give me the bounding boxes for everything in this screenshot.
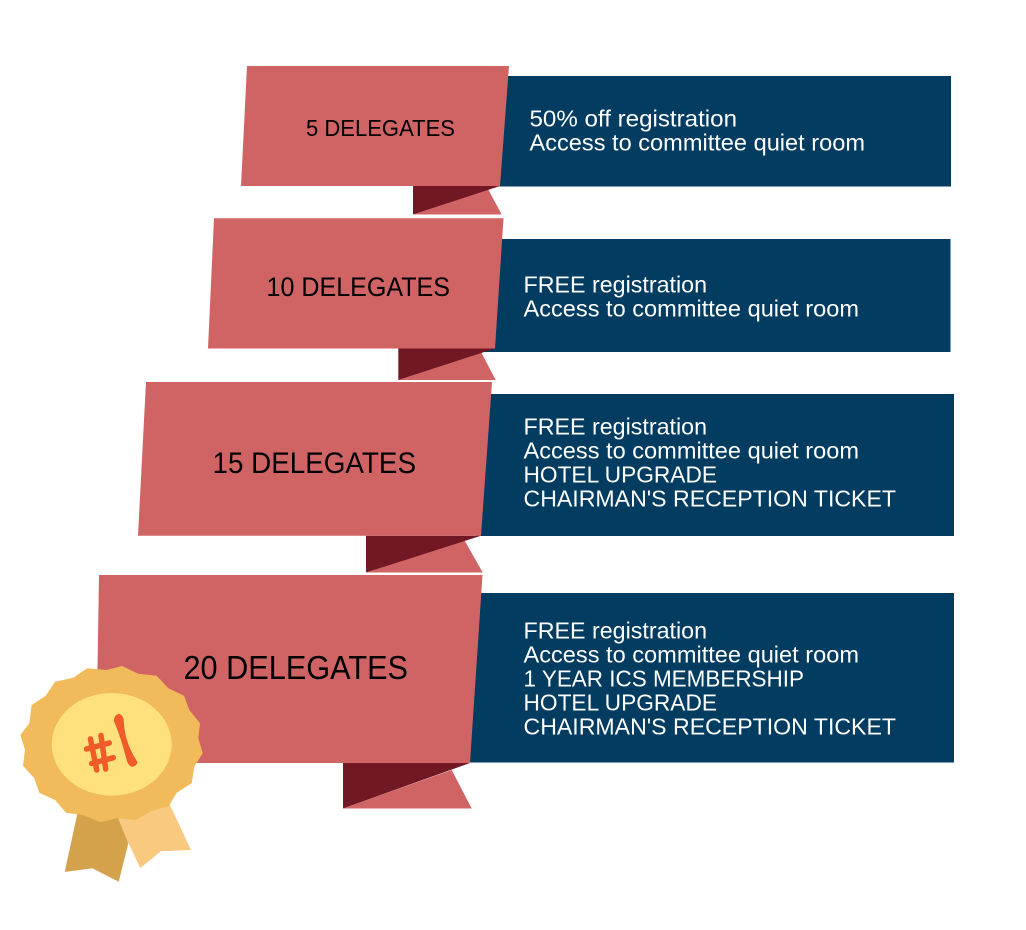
ribbon: 5 delegates bbox=[241, 66, 509, 186]
badge seal bbox=[20, 666, 203, 822]
benefits panel: 20 delegates: Access to committee quiet room bbox=[524, 642, 859, 668]
ribbon: 20 delegates bbox=[96, 575, 482, 763]
benefits panel: 15 delegates: CHAIRMAN'S RECEPTION TICKET bbox=[524, 486, 896, 512]
benefits panel: 15 delegates: Access to committee quiet room bbox=[524, 438, 859, 464]
benefits panel: 20 delegates: CHAIRMAN'S RECEPTION TICKET bbox=[524, 714, 896, 740]
tier: 15 delegates bbox=[138, 382, 954, 572]
benefits panel: 20 delegates: 1 YEAR ICS MEMBERSHIP bbox=[524, 666, 804, 692]
benefits panel: 15 delegates: FREE registration bbox=[524, 414, 707, 440]
ribbon: 10 delegates: 10 DELEGATES bbox=[266, 272, 450, 302]
ribbon fold: 10 delegates bbox=[398, 348, 496, 380]
benefits panel: 5 delegates bbox=[485, 76, 951, 186]
ribbon: 5 delegates: 5 DELEGATES bbox=[306, 115, 455, 141]
ribbon: 10 delegates bbox=[208, 218, 504, 348]
tier: 10 delegates bbox=[208, 218, 950, 380]
badge centre bbox=[52, 693, 172, 796]
icon: number one rosette badge bbox=[20, 666, 203, 882]
benefits panel: 5 delegates: Access to committee quiet room bbox=[530, 130, 865, 156]
benefits panel: 20 delegates bbox=[465, 593, 954, 762]
benefits panel: 20 delegates: HOTEL UPGRADE bbox=[524, 690, 717, 716]
benefits panel: 15 delegates: HOTEL UPGRADE bbox=[524, 462, 717, 488]
benefits panel: 10 delegates: Access to committee quiet room bbox=[524, 296, 859, 322]
benefits panel: 20 delegates: FREE registration bbox=[524, 618, 707, 644]
tier: 5 delegates bbox=[241, 66, 951, 214]
badge mark: hash one bbox=[86, 714, 137, 770]
badge ribbon tails bbox=[65, 803, 191, 882]
ribbon fold: 5 delegates bbox=[413, 186, 502, 214]
ribbon fold: 20 delegates bbox=[343, 763, 472, 808]
benefits panel: 15 delegates bbox=[476, 394, 954, 536]
ribbon: 15 delegates: 15 DELEGATES bbox=[212, 447, 416, 480]
benefits panel: 10 delegates bbox=[478, 239, 950, 352]
ribbon: 15 delegates bbox=[138, 382, 492, 536]
ribbon: 20 delegates: 20 DELEGATES bbox=[184, 649, 408, 686]
ribbon fold: 15 delegates bbox=[366, 536, 483, 572]
benefits panel: 5 delegates: 50% off registration bbox=[530, 106, 737, 132]
tier: 20 delegates bbox=[96, 575, 954, 808]
benefits panel: 10 delegates: FREE registration bbox=[524, 272, 707, 298]
